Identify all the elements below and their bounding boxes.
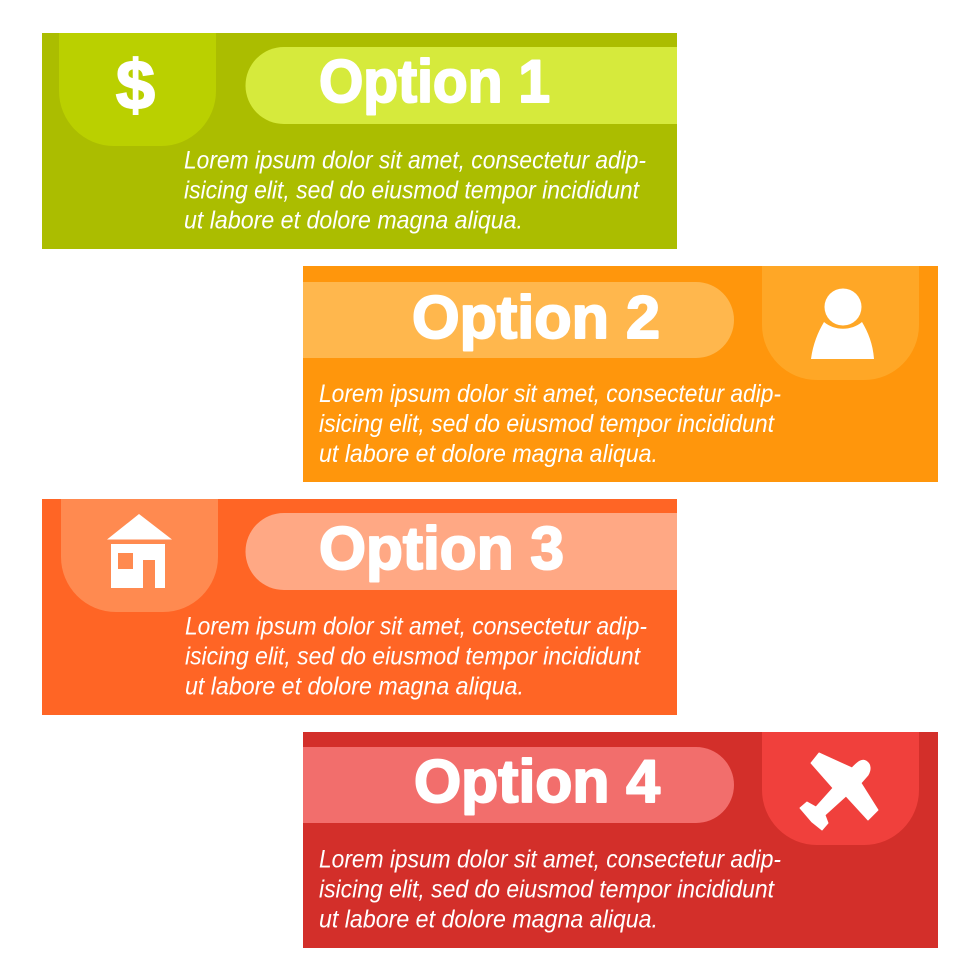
heading: option 3: Option 3 — [319, 515, 564, 582]
text block: option 2: Lorem ipsum dolor sit amet, consectetur adip- — [319, 380, 781, 408]
icon tab: option 3 — [61, 499, 218, 612]
text block: option 3 — [185, 612, 647, 700]
icon tab: option 4 — [762, 732, 919, 845]
text block: option 2 — [319, 380, 781, 468]
icon: dollar sign: $ — [116, 46, 155, 124]
title pill: option 3 — [245, 513, 677, 590]
icon: house — [107, 514, 172, 588]
panel: option 3 — [42, 499, 677, 715]
panel: option 1 — [42, 33, 677, 249]
text block: option 3: Lorem ipsum dolor sit amet, consectetur adip- — [185, 612, 647, 640]
icon: person — [811, 288, 874, 359]
title pill: option 2 — [303, 282, 734, 358]
title pill: option 1 — [245, 47, 677, 124]
text block: option 4: isicing elit, sed do eiusmod tempor incididunt — [319, 876, 775, 904]
text block: option 1: isicing elit, sed do eiusmod tempor incididunt — [184, 176, 640, 204]
text block: option 4 — [319, 846, 781, 934]
icon tab: option 1 — [59, 33, 216, 146]
heading: option 2: Option 2 — [412, 284, 660, 351]
icon tab: option 2 — [762, 266, 919, 380]
panel: option 4 — [303, 732, 938, 948]
title pill: option 4 — [303, 747, 734, 823]
text block: option 3: isicing elit, sed do eiusmod tempor incididunt — [185, 642, 641, 670]
text block: option 1: ut labore et dolore magna aliqua. — [184, 206, 523, 234]
heading: option 4: Option 4 — [414, 748, 661, 815]
text block: option 2: ut labore et dolore magna aliqua. — [319, 440, 658, 468]
text block: option 3: ut labore et dolore magna aliqua. — [185, 672, 524, 700]
text block: option 1: Lorem ipsum dolor sit amet, consectetur adip- — [184, 146, 646, 174]
text block: option 4: ut labore et dolore magna aliqua. — [319, 906, 658, 934]
text block: option 2: isicing elit, sed do eiusmod tempor incididunt — [319, 410, 775, 438]
icon: airplane — [800, 753, 878, 830]
text block: option 4: Lorem ipsum dolor sit amet, consectetur adip- — [319, 846, 781, 874]
heading: option 1: Option 1 — [319, 48, 550, 115]
panel: option 2 — [303, 266, 938, 482]
text block: option 1 — [184, 146, 646, 234]
